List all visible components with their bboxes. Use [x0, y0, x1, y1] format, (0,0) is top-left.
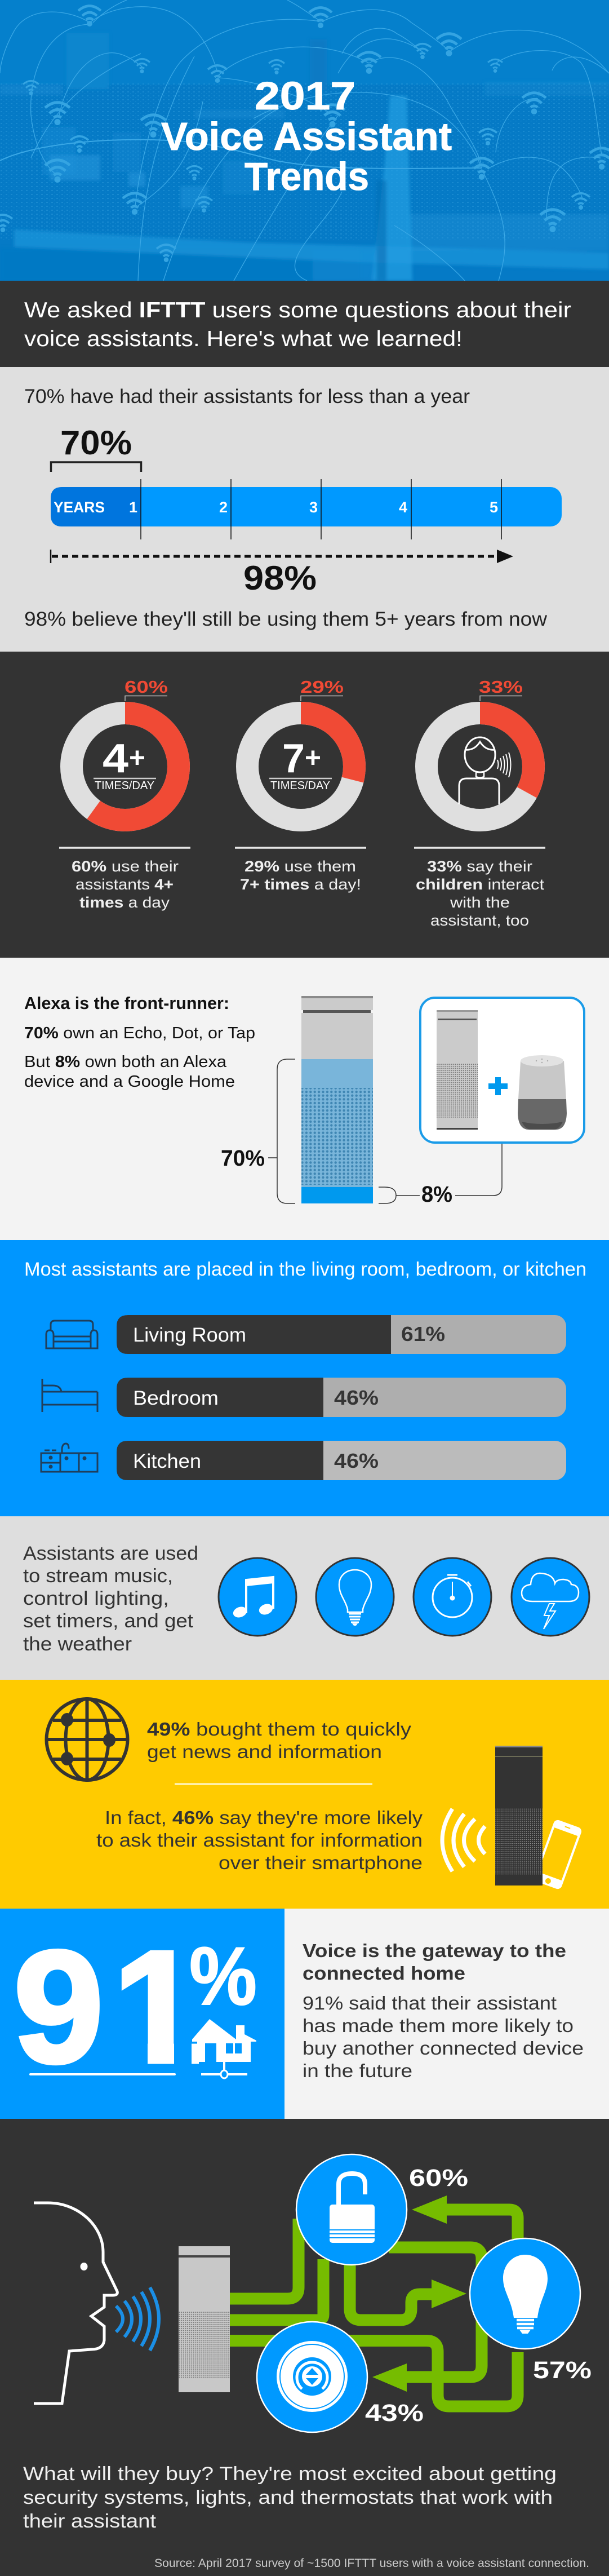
body text: 91% said that their assistant: [303, 1993, 557, 2013]
text block: Alexa is the front-runner:: [24, 993, 229, 1013]
caption: 60%: times a day: [79, 894, 170, 911]
closing text: What will they buy? They're most excited about getting: [23, 2463, 557, 2485]
70% bracket: [268, 1059, 295, 1203]
label: 57%: 57%: [533, 2357, 592, 2384]
echo bar chart: [301, 996, 373, 1203]
bar: kitchen: [117, 1441, 566, 1480]
text block: But 8% own both an Alexa: [24, 1053, 227, 1071]
donut: 60%: 60%: [125, 677, 168, 697]
donut: 29%: [247, 677, 354, 820]
bar: bedroom: Bedroom: [133, 1387, 219, 1409]
icon: phone: [533, 1819, 583, 1890]
70% stat: 70%: [60, 424, 132, 462]
green connector paths: [230, 2210, 518, 2406]
icon: sofa: [46, 1321, 97, 1348]
bracket: [51, 462, 141, 472]
base trim for the 1: [107, 2038, 192, 2065]
text block: 70% own an Echo, Dot, or Tap: [24, 1024, 255, 1042]
text block: device and a Google Home: [24, 1073, 235, 1091]
city image backdrop: [1, 82, 608, 281]
body text: in the future: [303, 2060, 412, 2081]
title: 2017: [255, 74, 355, 118]
heading: connected home: [303, 1963, 465, 1984]
caption: 60%: assistants 4+: [75, 876, 174, 893]
panel: hero banner: [0, 0, 609, 281]
use cases text: [23, 1543, 198, 1655]
icon: music: [219, 1558, 296, 1636]
text block: [24, 993, 255, 1091]
bar: bedroom: [117, 1378, 566, 1417]
caption: 60%: [72, 858, 179, 911]
bar: living room: 61%: [401, 1322, 445, 1345]
caption: 60%: 60% use their: [72, 858, 179, 875]
news text: [147, 1719, 412, 1762]
donut: 60%: [72, 677, 179, 820]
donut: 33% with child icon: [426, 677, 534, 820]
year bar: 3: [309, 499, 318, 516]
label: 43%: 43%: [365, 2400, 424, 2427]
donut: 29%: TIMES/DAY: [270, 780, 330, 792]
panel: ownership timeline: 98% believe they'll still be using them 5+ years from now: [24, 608, 548, 630]
caption: 33%: children interact: [416, 876, 545, 893]
panel: use cases: [0, 1516, 609, 1680]
panel: what they will buy: [0, 2119, 609, 2576]
body text: buy another connected device: [303, 2038, 584, 2059]
year bar: 4: [399, 499, 407, 516]
dashed arrow: [51, 550, 513, 563]
body text: has made them more likely to: [303, 2015, 574, 2036]
google home: [518, 1055, 567, 1130]
91 figure: 1: [113, 1918, 201, 2096]
98% stat: 98%: [243, 559, 317, 597]
caption: 29%: 29% use them: [245, 858, 356, 875]
caption: 29%: [240, 858, 361, 893]
year bar: 2: [219, 499, 228, 516]
icon: speaking face: [34, 2203, 117, 2404]
smartphone text: [96, 1807, 423, 1873]
panel: intro statement: We asked IFTTT users some questions about their: [24, 298, 571, 322]
panel: placement bars: Most assistants are placed in the living room, bedroom, or kitchen: [24, 1259, 586, 1280]
bar: living room: [117, 1315, 566, 1354]
body text: [303, 1993, 584, 2081]
panel: placement bars: [0, 1240, 609, 1516]
smartphone text: to ask their assistant for information: [96, 1830, 423, 1851]
bar: kitchen: Kitchen: [133, 1450, 201, 1472]
icon: thermostat: [257, 2322, 367, 2432]
smartphone text: In fact, 46% say they're more likely: [105, 1807, 423, 1828]
use cases text: Assistants are used: [23, 1543, 198, 1564]
news text: get news and information: [147, 1741, 382, 1762]
icon: globe: [46, 1699, 127, 1780]
icon: light bulb: [470, 2238, 580, 2349]
donut: 60%: TIMES/DAY: [95, 780, 154, 792]
percent sign: %: [189, 1930, 257, 2022]
use cases text: set timers, and get: [23, 1610, 194, 1632]
title: [161, 81, 452, 191]
icon: black echo: [495, 1746, 543, 1885]
use cases text: to stream music,: [23, 1565, 173, 1587]
mini echo: [437, 1010, 478, 1130]
wifi symbols: [0, 6, 609, 262]
panel: ownership timeline: 70% have had their assistants for less than a year: [24, 386, 470, 408]
bar: kitchen: 46%: [334, 1449, 379, 1472]
source note: Source: April 2017 survey of ~1500 IFTTT users with a voice assistant connection.: [154, 2557, 589, 2570]
title: Trends: [245, 154, 369, 198]
closing text: their assistant: [23, 2511, 157, 2532]
year bar: YEARS: [54, 499, 105, 516]
70% label: 70%: [221, 1146, 265, 1171]
panel: intro statement: [0, 281, 609, 367]
panel: news and smartphone: [0, 1680, 609, 1909]
title: Voice Assistant: [161, 114, 452, 158]
year bar: 1: [129, 499, 137, 516]
sound waves: [442, 1809, 485, 1871]
panel: usage donuts: [0, 652, 609, 958]
icon: child speaking: [459, 737, 510, 804]
use cases text: the weather: [23, 1634, 132, 1655]
donut: 60%: +: [129, 742, 145, 773]
closing text: security systems, lights, and thermostats that work with: [23, 2487, 553, 2508]
donut: 29%: 7: [282, 736, 305, 781]
panel: alexa ownership: [0, 958, 609, 1240]
icon: kitchen: [41, 1444, 97, 1472]
8% connector: [379, 1143, 502, 1203]
bar: living room: Living Room: [133, 1324, 246, 1346]
panel: intro statement: voice assistants. Here's what we learned!: [24, 327, 463, 351]
callout: both devices: [420, 998, 584, 1143]
caption: 33%: 33% say their: [427, 858, 532, 875]
label: 60%: 60%: [409, 2165, 468, 2192]
caption: 33%: assistant, too: [430, 912, 529, 929]
heading: Voice is the gateway to the: [303, 1940, 566, 1961]
8% label: 8%: [421, 1182, 452, 1207]
voice waves: [116, 2287, 159, 2351]
year bar: [51, 479, 562, 539]
panel: 91 percent stat: [0, 1909, 609, 2119]
donut: 29%: +: [305, 742, 321, 773]
network arcs: [0, 0, 609, 281]
donut: 33% with child icon: 33%: [479, 677, 523, 697]
caption: 33%: with the: [450, 894, 510, 911]
91 figure: [14, 1918, 201, 2096]
news text: 49% bought them to quickly: [147, 1719, 412, 1740]
caption: 29%: 7+ times a day!: [240, 876, 361, 893]
donut: 60%: 4: [103, 736, 128, 781]
caption: 33%: [416, 858, 545, 929]
panel: ownership timeline: [0, 367, 609, 652]
donut: 29%: 29%: [300, 677, 344, 697]
smartphone text: over their smartphone: [219, 1852, 423, 1873]
icon: bed: [42, 1379, 97, 1412]
heading: [303, 1940, 566, 1984]
divider lines: [59, 847, 545, 849]
icon: lock: [296, 2154, 407, 2265]
arrowheads: [372, 2196, 466, 2392]
icon: bulb: [316, 1558, 394, 1636]
underline: [30, 2073, 175, 2075]
icon: weather: [512, 1558, 589, 1636]
icon: stopwatch: [414, 1558, 491, 1636]
91 figure: 9: [14, 1918, 104, 2096]
year bar: 5: [490, 499, 498, 516]
use cases text: control lighting,: [23, 1588, 169, 1609]
icon: echo speaker: [179, 2246, 230, 2392]
closing text: [23, 2463, 557, 2532]
icon: connected house: [192, 2019, 256, 2078]
plus sign: [488, 1077, 508, 1095]
bar: bedroom: 46%: [334, 1386, 379, 1409]
